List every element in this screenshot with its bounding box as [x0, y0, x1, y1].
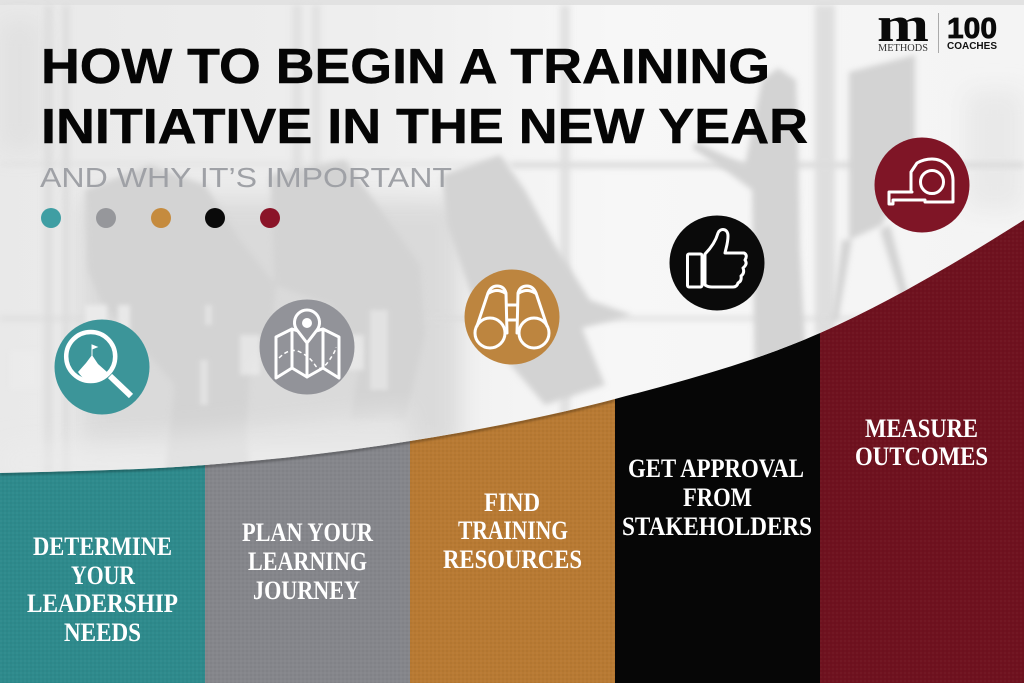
label: determine your leadership needs — [27, 532, 178, 647]
logo: Methods and 100 Coaches: 100 — [947, 13, 997, 45]
icon: binoculars — [464, 270, 560, 364]
label: find training resources: TRAINING — [458, 516, 568, 545]
label: measure outcomes — [855, 414, 988, 471]
label: measure outcomes: OUTCOMES — [855, 442, 988, 471]
logo: Methods and 100 Coaches: COACHES — [947, 40, 997, 52]
label: get approval from stakeholders: STAKEHOLDERS — [622, 512, 812, 541]
label: find training resources — [443, 488, 582, 574]
panel: column orange — [410, 390, 615, 683]
label: determine your leadership needs: LEADERSHIP — [27, 589, 178, 618]
label: plan your learning journey: JOURNEY — [253, 576, 360, 605]
label: measure outcomes: MEASURE — [865, 414, 978, 443]
panel: column teal — [0, 440, 205, 683]
title — [41, 40, 808, 154]
label: get approval from stakeholders: FROM — [683, 483, 752, 512]
subtitle: AND WHY IT’S IMPORTANT — [40, 162, 452, 193]
icon: map with pin — [260, 300, 354, 394]
label: plan your learning journey: PLAN YOUR — [242, 518, 373, 547]
label: determine your leadership needs: DETERMINE — [33, 532, 172, 561]
background photo: blurred office silhouettes — [0, 0, 1024, 480]
curve shadow — [0, 400, 615, 474]
panel: column maroon — [820, 210, 1024, 683]
logo: Methods and 100 Coaches: METHODS — [878, 43, 928, 54]
icon: magnifier with mountain — [54, 320, 150, 414]
label: get approval from stakeholders — [622, 454, 812, 541]
logo: Methods and 100 Coaches — [877, 0, 997, 54]
icon: tape measure — [874, 138, 970, 232]
title: HOW TO BEGIN A TRAINING — [41, 40, 770, 94]
panel: column black — [615, 330, 820, 683]
panel: column grey — [205, 420, 410, 683]
label: plan your learning journey — [242, 518, 373, 605]
label: plan your learning journey: LEARNING — [248, 547, 367, 576]
label: find training resources: FIND — [484, 488, 540, 517]
icon: thumbs up — [670, 216, 764, 310]
label: find training resources: RESOURCES — [443, 545, 582, 574]
title: INITIATIVE IN THE NEW YEAR — [41, 100, 808, 154]
label: determine your leadership needs: YOUR — [71, 561, 135, 590]
colour dots — [41, 208, 280, 228]
label: get approval from stakeholders: GET APPROVAL — [628, 454, 804, 483]
label: determine your leadership needs: NEEDS — [64, 618, 141, 647]
